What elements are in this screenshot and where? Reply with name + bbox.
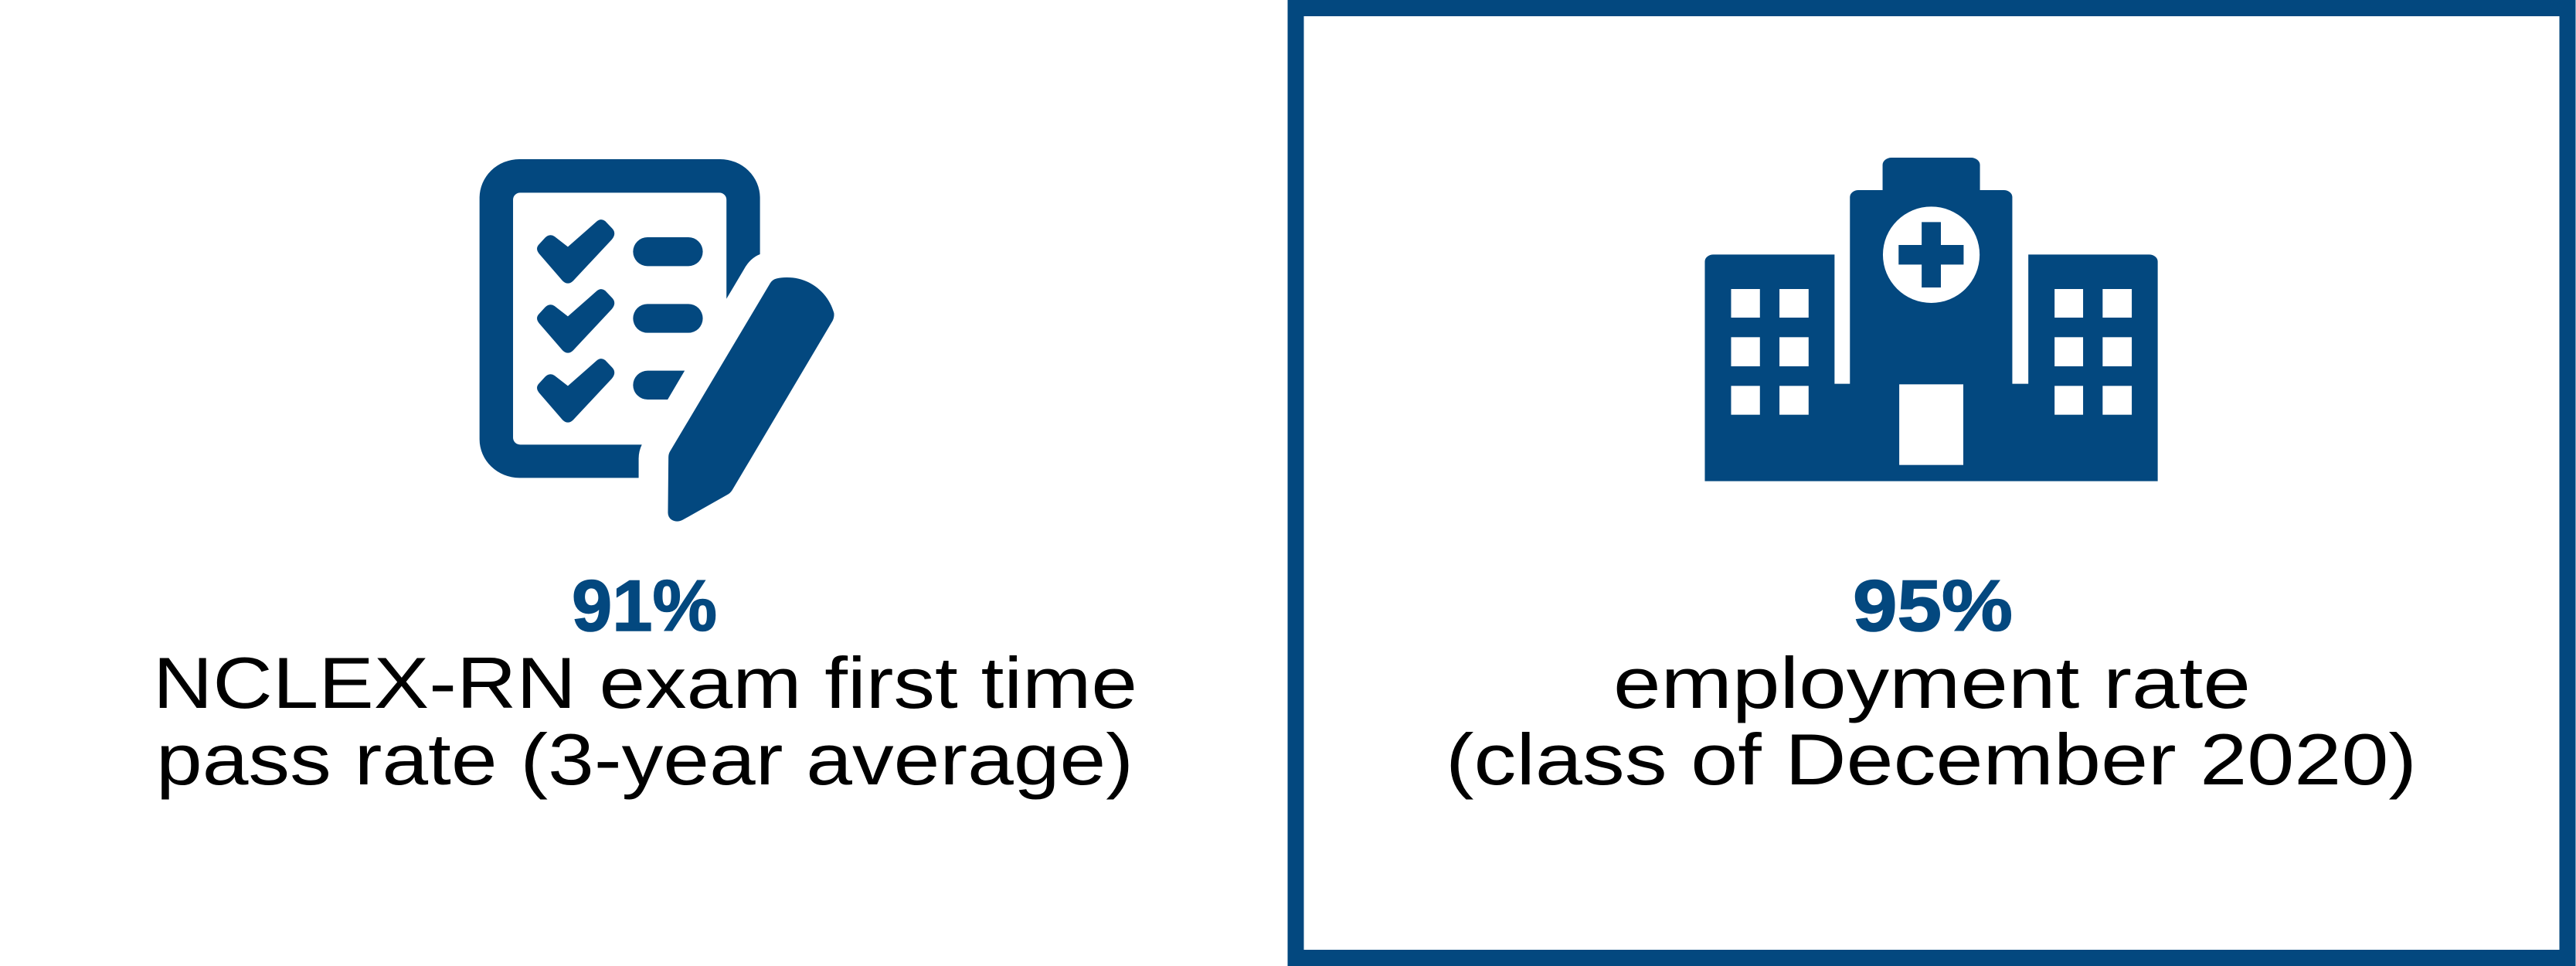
panel: employment rate (1296, 8, 2568, 958)
stat: 95%: 95% (1853, 565, 2013, 646)
caption: NCLEX-RN line 1: NCLEX-RN exam first time (153, 642, 1137, 723)
panel: NCLEX-RN pass rate (153, 159, 1137, 800)
caption: employment rate: employment rate (1613, 642, 2251, 723)
stat: 91%: 91% (572, 565, 717, 646)
icon: checklist and pencil (480, 159, 834, 522)
icon: hospital (1704, 158, 2158, 481)
panel border (1296, 8, 2568, 958)
caption: NCLEX-RN line 2: pass rate (3-year average) (156, 719, 1133, 800)
caption: class of December 2020: (class of December 2020) (1446, 719, 2417, 800)
